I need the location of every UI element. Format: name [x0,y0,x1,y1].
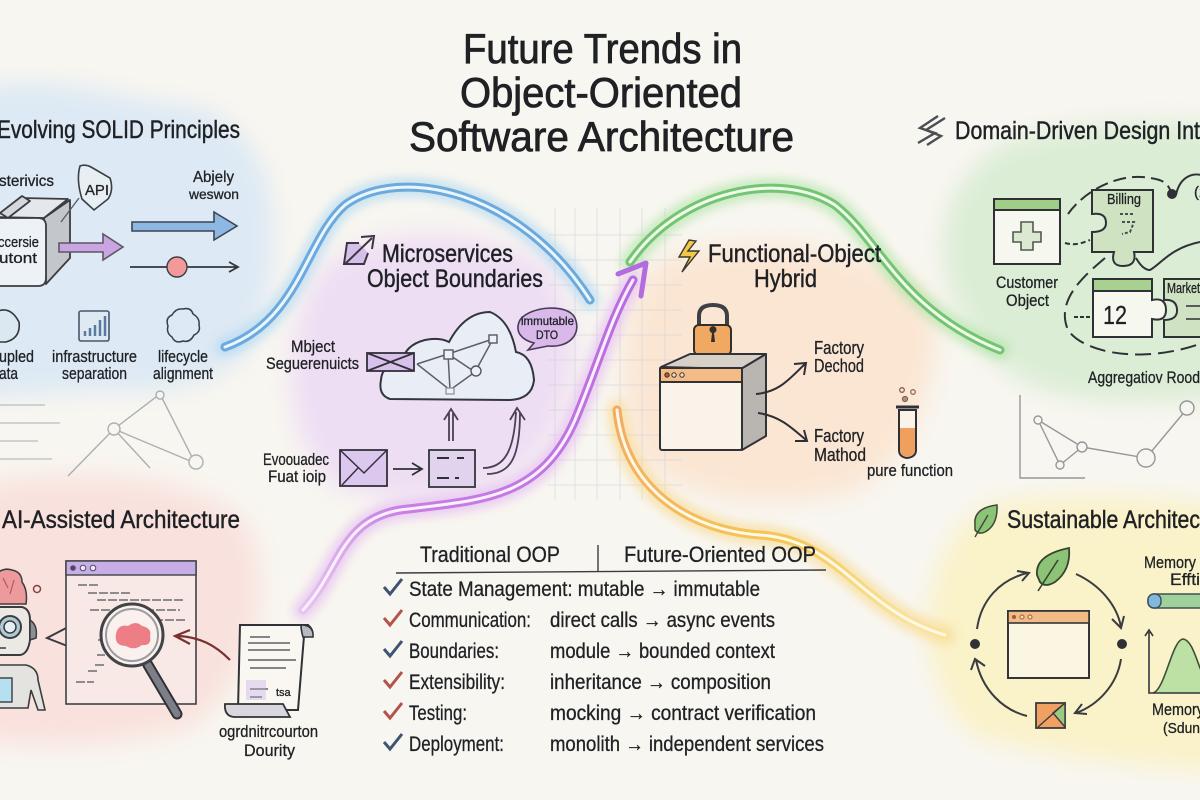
heading: solid: Evolving SOLID Principles [0,116,240,144]
faint grid [548,208,682,500]
panel: comparison table: Future-Oriented OOP [624,542,816,567]
row: boundaries: module → bounded context [550,640,775,663]
panel: Microservices Object Boundaries: Fuat ioip [268,467,326,486]
callout: immutable DTO: DTO [536,328,558,342]
arrow: up right [756,363,806,394]
label: pure function: pure function [867,461,953,480]
puzzle: window [1093,279,1166,337]
title: Object-Oriented [460,69,742,116]
row: state management: State Management: mutable → immutable [409,578,760,601]
panel: Evolving SOLID Principles: weswon [188,186,239,202]
label: organization dourity: ogrdnitrcourton [219,722,318,741]
panel: Evolving SOLID Principles: utont [0,250,38,267]
label: factory dechod: Factory [814,338,864,358]
label: factory mathod: Factory [814,426,864,446]
panel: Microservices Object Boundaries [263,236,577,487]
panel: AI-Assisted Architecture: Dourity [244,741,295,760]
dashed aggregates [1065,174,1200,354]
API tag [61,165,112,222]
icon: coupled [0,310,19,342]
API tag: API [85,182,109,199]
icon: padlock [694,305,731,355]
sketch: right network [1020,395,1194,478]
small box [429,450,475,487]
panel: Sustainable Architecture: Effti [1170,570,1200,589]
icon: lightning [679,240,699,272]
icon: leaf large [1037,548,1069,591]
panel: Evolving SOLID Principles [0,116,240,383]
scroll: tsa [276,687,292,699]
row: testing: mocking → contract verification [550,702,816,725]
panel: Domain-Driven Design [918,116,1200,387]
label: customer object: Customer [996,273,1058,292]
panel: Functional-Object Hybrid: Dechod [814,356,864,376]
arrow: envelope to box [393,463,422,475]
row: boundaries: Boundaries: [409,640,499,663]
row: deployment [384,733,824,756]
puzzle: window: 12 [1103,300,1127,330]
icon: leaf small [975,505,997,537]
title [409,25,794,160]
icon: bars [79,311,109,341]
progress bar [1148,594,1200,608]
window box [660,354,766,450]
row: communication: direct calls → async events [550,609,775,632]
panel: AI-Assisted Architecture [0,506,318,760]
purple arrow [59,234,123,260]
box icon [0,196,70,286]
envelope icon [1036,703,1065,728]
row: extensibility [384,671,771,694]
blue arrow [132,212,237,240]
panel: comparison table [384,542,826,756]
title: Future Trends in [463,25,742,72]
panel: Evolving SOLID Principles: alignment [153,364,213,383]
icon: launch [344,236,374,264]
panel: Domain-Driven Design: Object [1006,291,1049,310]
row: testing: Testing: [409,702,467,725]
label: evoouadec: Evoouadec [263,450,329,469]
table headers: Traditional OOP [420,542,560,567]
row: deployment: Deployment: [409,733,504,756]
dot arrow [130,257,238,277]
label: infrastructure: infrastructure [52,347,137,366]
ribbon: purple arrow [303,263,646,610]
panel: Microservices Object Boundaries: Object Boundaries [367,265,543,293]
label: lifecycle: lifecycle [158,347,208,366]
arrow: down right [758,413,807,441]
label: abjely: Abjely [193,169,234,186]
envelope top [367,353,414,371]
panel: Functional-Object Hybrid: Hybrid [754,265,817,293]
icon: test tube [896,388,919,458]
panel: Sustainable Architecture [970,505,1200,737]
arrow: curve up [483,408,525,474]
row: testing [384,702,816,725]
row: extensibility: inheritance → composition [550,671,771,694]
window [1008,611,1089,678]
code window [66,561,196,704]
magnifier [101,604,177,714]
label: coupled data: upled [0,347,34,366]
puzzle: billing: Billing [1107,191,1141,208]
title: Software Architecture [409,113,794,160]
chart [1145,630,1200,693]
ribbon: green [630,188,1000,350]
cloud with network [380,312,534,400]
arrow: red [175,630,230,660]
callout wedge [47,626,75,649]
scroll [225,625,313,717]
envelope bottom [340,450,387,486]
robot [0,569,45,710]
ribbon: orange to yellow [617,410,945,635]
row: boundaries [384,640,775,663]
cycle arrows [970,571,1127,716]
heading: microservices: Microservices [382,240,513,268]
callout: immutable DTO: immutable [521,314,574,328]
puzzle: market [1164,279,1200,337]
panel: Functional-Object Hybrid: Mathod [814,445,866,465]
label: box: sterivics [0,173,54,190]
label: mbject: Mbject [291,337,335,356]
customer window [994,199,1060,264]
arrow: box up [444,409,458,441]
panel: Microservices Object Boundaries: Seguerenuicts [266,354,359,373]
callout: immutable DTO [518,308,577,350]
row: communication [384,609,775,632]
panel: Evolving SOLID Principles: separation [62,364,127,383]
row: extensibility: Extensibility: [409,671,505,694]
heading: functional: Functional-Object [708,240,881,268]
icon: gear cloud [167,309,199,342]
row: deployment: monolith → independent services [550,733,824,756]
icon: ddd [918,116,945,145]
puzzle: billing [1092,190,1153,266]
ribbon: blue [225,187,590,347]
heading: ai: AI-Assisted Architecture [2,506,240,534]
panel: Functional-Object Hybrid [660,240,953,480]
sketch: left network [0,391,203,476]
row: communication: Communication: [409,609,531,632]
